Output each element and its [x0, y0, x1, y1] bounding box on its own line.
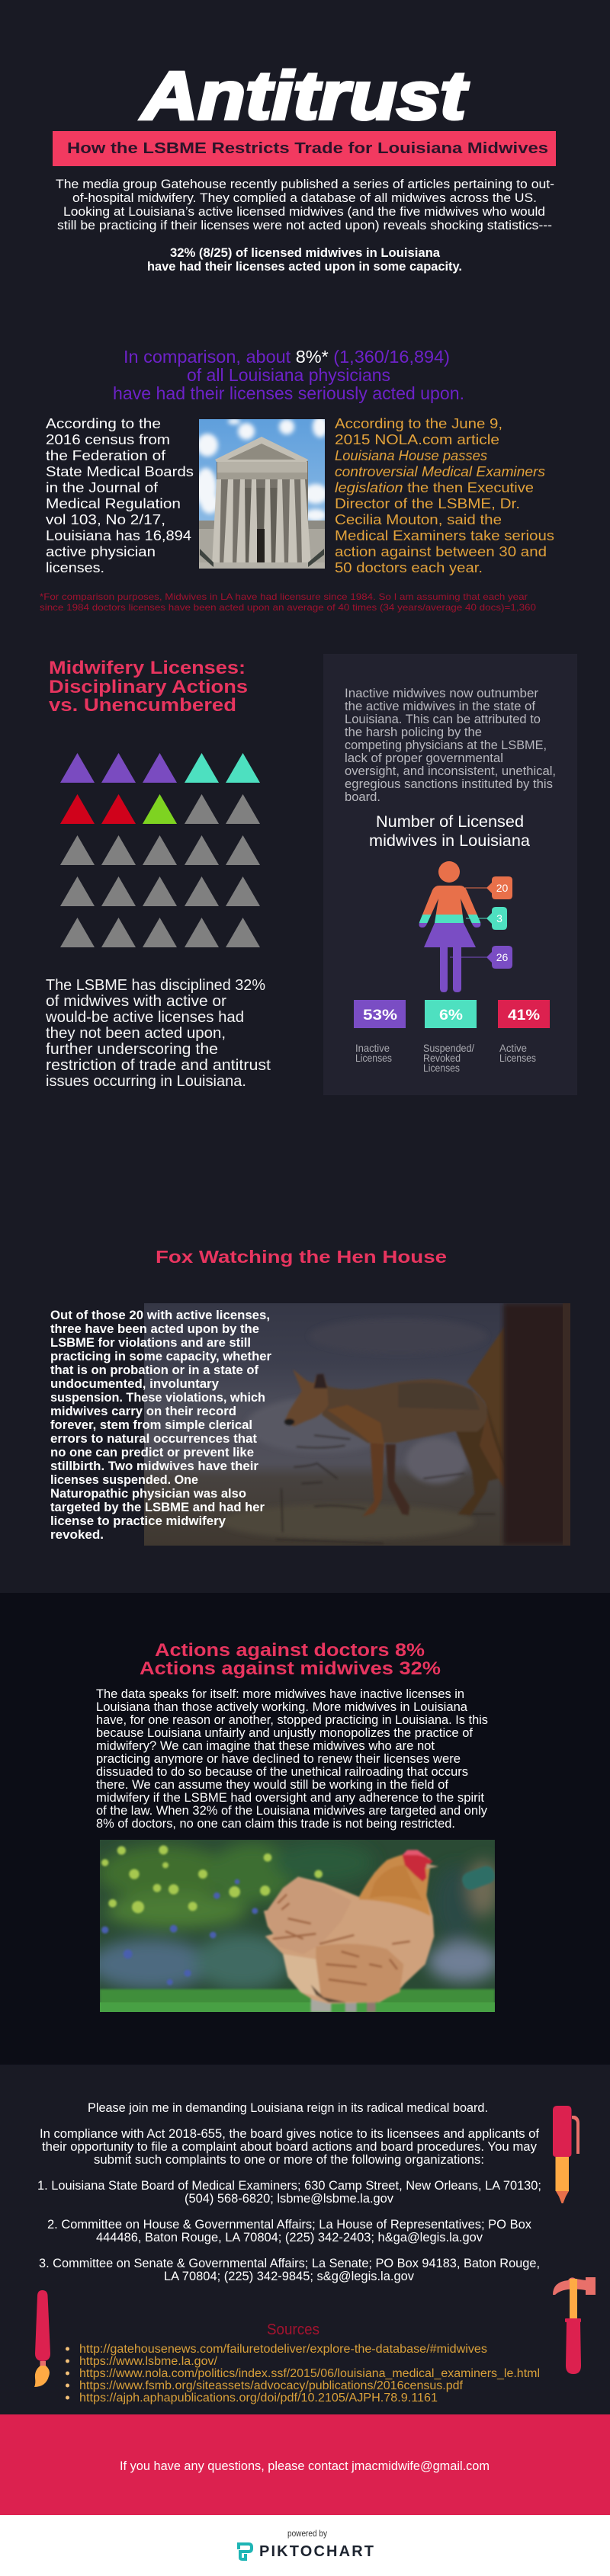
heading: sources: Sources — [267, 2321, 319, 2338]
panel text: lack of proper governmental — [345, 751, 503, 765]
stat box: 41% active: 41% — [508, 1008, 540, 1024]
text: LSBME disciplined 32%: they not been acted upon, — [46, 1025, 226, 1042]
stat box: 53% inactive: 53% — [363, 1008, 397, 1024]
footnote: *For comparison purposes, Midwives in LA have had licensure since 1984. So I am assuming that each year — [40, 591, 528, 602]
title: Antitrust — [140, 57, 469, 133]
text: LSBME disciplined 32%: restriction of trade and antitrust — [46, 1057, 271, 1074]
heading: actions against doctors and midwives: Actions against midwives 32% — [140, 1658, 441, 1679]
list of complaint organizations: 2. Committee on House & Governmental Affairs; La House of Representatives; PO Box — [47, 2217, 531, 2232]
sources list: https://www.lsbme.la.gov/ — [79, 2355, 218, 2368]
text: the data speaks for itself: of the law. When 32% of the Louisiana midwives are targeted and only — [96, 1804, 488, 1818]
panel text: board. — [345, 790, 380, 804]
comparison statistic 8%: of all Louisiana physicians — [187, 365, 390, 385]
stat box: 6% suspended — [423, 1000, 477, 1074]
sources list: https://ajph.aphapublications.org/doi/pdf/10.2105/AJPH.78.9.1161 — [79, 2392, 438, 2405]
intro paragraph: still be practicing if their licenses were not acted upon) reveals shocking statistics--- — [57, 218, 552, 232]
icon: female figure chart — [419, 861, 480, 992]
text: out of those 20: license to practice midwifery — [50, 1514, 226, 1528]
text: join me in demanding — [40, 2100, 539, 2167]
NOLA article text column: Louisiana House passes — [335, 447, 487, 463]
heading: midwifery licenses: Disciplinary Actions — [49, 677, 248, 697]
census text column: active physician — [46, 543, 156, 559]
census text column: vol 103, No 2/17, — [46, 511, 165, 527]
panel: inactive midwives — [323, 654, 577, 1095]
census text column: 2016 census from — [46, 431, 170, 447]
comparison statistic 8%: In comparison, about 8%* (1,360/16,894) — [124, 347, 450, 367]
text: out of those 20: midwives carry on their record — [50, 1404, 236, 1418]
stat box: 41% active — [498, 1000, 550, 1064]
text: out of those 20: revoked. — [50, 1527, 104, 1542]
stat box: 53% inactive — [354, 1000, 406, 1064]
text: the data speaks for itself: Louisiana than those actively working. More midwives in Louisiana — [96, 1700, 468, 1714]
footer: powered by piktochart: powered by — [287, 2528, 327, 2539]
text: LSBME disciplined 32%: of midwives with active or — [46, 993, 226, 1010]
text: the data speaks for itself: The data speaks for itself: more midwives have inactive licenses in — [96, 1687, 464, 1701]
triangle pictogram: 25 midwives — [60, 753, 260, 947]
heading: fox watching the hen house: Fox Watching the Hen House — [156, 1247, 447, 1267]
text: join me in demanding: submit such complaints to one or more of the following organizations: — [94, 2152, 484, 2167]
text: the data speaks for itself: dissuaded to do so because of the unethical railroading that occurs — [96, 1765, 468, 1779]
panel text: Inactive midwives now outnumber — [345, 687, 539, 700]
icon: hammer — [553, 2277, 596, 2374]
NOLA article text column: 2015 NOLA.com article — [335, 431, 499, 447]
text: out of those 20: LSBME for violations and are still — [50, 1335, 251, 1350]
intro paragraph: The media group Gatehouse recently published a series of articles pertaining to out- — [56, 177, 554, 191]
text: out of those 20 — [50, 1308, 271, 1542]
stat box: 6% suspended: Licenses — [423, 1062, 460, 1074]
sources list: https://www.nola.com/politics/index.ssf/2015/06/louisiana_medical_examiners_le.html — [79, 2367, 540, 2380]
text: the data speaks for itself: because Louisiana unfairly and unjustly monopolizes the practice of — [96, 1726, 473, 1740]
intro paragraph — [56, 177, 554, 232]
census text column: the Federation of — [46, 447, 166, 463]
NOLA article text column: Director of the LSBME, Dr. — [335, 495, 520, 511]
heading: midwifery licenses: vs. Unencumbered — [49, 695, 236, 716]
text: join me in demanding: Please join me in demanding Louisiana reign in its radical medical board. — [88, 2100, 488, 2115]
key statistic 32% — [147, 245, 462, 274]
text: LSBME disciplined 32%: further underscoring the — [46, 1041, 218, 1058]
sources list: http://gatehousenews.com/failuretodeliver/explore-the-database/#midwives — [79, 2343, 487, 2356]
subtitle banner — [53, 131, 556, 166]
text: out of those 20: three have been acted upon by the — [50, 1322, 259, 1336]
stat box: 53% inactive: Inactive — [355, 1042, 390, 1054]
text: join me in demanding: their opportunity to file a complaint about board actions and board procedures. You may — [42, 2139, 537, 2154]
NOLA article text column: action against between 30 and — [335, 543, 547, 559]
comparison statistic 8% — [113, 347, 464, 403]
text: out of those 20: no one can predict or prevent like — [50, 1445, 254, 1459]
icon: pen — [553, 2106, 580, 2203]
photo: fox — [144, 1303, 570, 1546]
heading: midwifery licenses: Midwifery Licenses: — [49, 658, 246, 678]
callout: 26 — [450, 946, 512, 969]
contact band: If you have any questions, please contact jmacmidwife@gmail.com — [120, 2459, 490, 2473]
photo: hen — [90, 1840, 499, 2012]
text: the data speaks for itself: 8% of doctors, no one can claim this trade is not being restricted. — [96, 1817, 455, 1831]
heading: actions against doctors and midwives — [140, 1640, 441, 1679]
NOLA article text column: 50 doctors each year. — [335, 559, 483, 575]
list of complaint organizations: 1. Louisiana State Board of Medical Examiners; 630 Camp Street, New Orleans, LA 70130; — [37, 2178, 541, 2193]
intro paragraph: Looking at Louisiana’s active licensed midwives (and the five midwives who would — [63, 204, 545, 219]
text: out of those 20: undocumented, involuntary — [50, 1376, 220, 1391]
text: the data speaks for itself — [96, 1687, 488, 1831]
census text column: State Medical Boards — [46, 463, 194, 479]
footer: powered by piktochart: PIKTOCHART — [259, 2543, 374, 2560]
panel text: Louisiana. This can be attributed to — [345, 713, 541, 726]
text: out of those 20: stillbirth. Two midwives have their — [50, 1459, 258, 1473]
census text column: According to the — [46, 415, 161, 431]
callout: 3: 3 — [496, 912, 502, 924]
panel text: the active midwives in the state of — [345, 700, 535, 713]
text: join me in demanding: In compliance with Act 2018-655, the board gives notice to its licensees and applicants of — [40, 2126, 539, 2141]
census text column — [46, 415, 194, 575]
text: the data speaks for itself: midwifery? We can imagine that these midwives who are not — [96, 1739, 435, 1753]
text: out of those 20: suspension. These violations, which — [50, 1390, 265, 1405]
photo: courthouse — [195, 416, 328, 569]
stat box: 6% suspended: 6% — [439, 1008, 463, 1024]
callout: 3 — [466, 907, 507, 930]
text: LSBME disciplined 32%: would-be active licenses had — [45, 1009, 244, 1026]
text: LSBME disciplined 32% — [45, 977, 271, 1090]
NOLA article text column: controversial Medical Examiners — [335, 463, 545, 479]
icon: paintbrush — [34, 2290, 50, 2387]
text: out of those 20: that is on probation or in a state of — [50, 1363, 258, 1377]
icon: piktochart logo — [239, 2544, 252, 2559]
panel text: competing physicians at the LSBME, — [345, 739, 547, 752]
callout: 20: 20 — [496, 882, 508, 894]
NOLA article text column: According to the June 9, — [335, 415, 502, 431]
key statistic 32%: 32% (8/25) of licensed midwives in Louisiana — [170, 245, 441, 260]
chart title: Number of Licensed — [376, 813, 524, 831]
dark band: actions — [0, 1593, 610, 2065]
NOLA article text column: legislation the then Executive — [335, 479, 534, 495]
footnote — [40, 591, 536, 613]
panel text: the harsh policing by the — [345, 726, 482, 739]
chart title: midwives in Louisiana — [369, 832, 530, 850]
callout: 26: 26 — [496, 951, 508, 963]
list of complaint organizations: (504) 568-6820; lsbme@lsbme.la.gov — [185, 2191, 393, 2206]
subtitle banner: How the LSBME Restricts Trade for Louisiana Midwives — [67, 140, 548, 157]
panel text — [345, 687, 556, 804]
heading: actions against doctors and midwives: Actions against doctors 8% — [155, 1640, 425, 1661]
text: out of those 20: Naturopathic physician was also — [50, 1486, 246, 1501]
text: LSBME disciplined 32%: issues occurring in Louisiana. — [46, 1073, 246, 1090]
census text column: Louisiana has 16,894 — [46, 527, 191, 543]
heading: midwifery licenses — [49, 658, 248, 716]
text: out of those 20: forever, stem from simple clerical — [50, 1418, 252, 1432]
text: out of those 20: Out of those 20 with active licenses, — [50, 1308, 270, 1322]
text: the data speaks for itself: practicing anymore or have declined to renew their licenses were — [96, 1752, 461, 1766]
stat box: 53% inactive: Licenses — [355, 1052, 392, 1064]
NOLA article text column: Medical Examiners take serious — [335, 527, 554, 543]
text: the data speaks for itself: midwifery if the LSBME had oversight and any adherence to the spirit — [96, 1791, 484, 1805]
key statistic 32%: have had their licenses acted upon in some capacity. — [147, 259, 462, 274]
stat box: 6% suspended: Suspended/ — [423, 1042, 474, 1054]
stat box: 6% suspended: Revoked — [423, 1052, 461, 1064]
text: out of those 20: targeted by the LSBME and had her — [50, 1500, 265, 1514]
list of complaint organizations — [37, 2178, 541, 2283]
intro paragraph: of-hospital midwifery. They complied a database of all midwives across the US. — [72, 191, 537, 205]
list of complaint organizations: 3. Committee on Senate & Governmental Affairs; La Senate; PO Box 94183, Baton Rouge, — [39, 2256, 540, 2270]
census text column: Medical Regulation — [46, 495, 181, 511]
comparison statistic 8%: have had their licenses seriously acted upon. — [113, 383, 464, 403]
chart title — [369, 813, 530, 850]
text: the data speaks for itself: there. We can assume they would still be working in the field of — [96, 1778, 448, 1792]
text: out of those 20: licenses suspended. One — [50, 1472, 198, 1487]
NOLA article text column — [335, 415, 554, 575]
list of complaint organizations: LA 70804; (225) 342-9845; s&g@legis.la.gov — [164, 2269, 414, 2283]
text: out of those 20: practicing in some capacity, whether — [50, 1349, 271, 1363]
sources list — [66, 2343, 540, 2405]
text: the data speaks for itself: have, for one reason or another, stopped practicing in Louisiana. Is this — [96, 1713, 488, 1727]
footer: powered by piktochart — [0, 2515, 610, 2576]
sources list: https://www.fsmb.org/siteassets/advocacy/publications/2016census.pdf — [79, 2379, 464, 2392]
stat box: 41% active: Licenses — [499, 1052, 536, 1064]
text: LSBME disciplined 32%: The LSBME has disciplined 32% — [46, 977, 265, 994]
NOLA article text column: Cecilia Mouton, said the — [335, 511, 502, 527]
text: out of those 20: errors to natural occurrences that — [50, 1431, 257, 1446]
list of complaint organizations: 444486, Baton Rouge, LA 70804; (225) 342-2403; h&ga@legis.la.gov — [96, 2230, 483, 2244]
stat box: 41% active: Active — [499, 1042, 527, 1054]
census text column: in the Journal of — [46, 479, 159, 495]
callout: 20 — [465, 876, 512, 899]
panel text: oversight, and inconsistent, unethical, — [345, 764, 556, 778]
footnote: since 1984 doctors licenses have been acted upon an average of 40 times (34 years/average 40 docs)=1,360 — [40, 602, 536, 613]
contact band — [0, 2414, 610, 2515]
census text column: licenses. — [46, 559, 104, 575]
panel text: egregious sanctions instituted by this — [345, 777, 553, 791]
